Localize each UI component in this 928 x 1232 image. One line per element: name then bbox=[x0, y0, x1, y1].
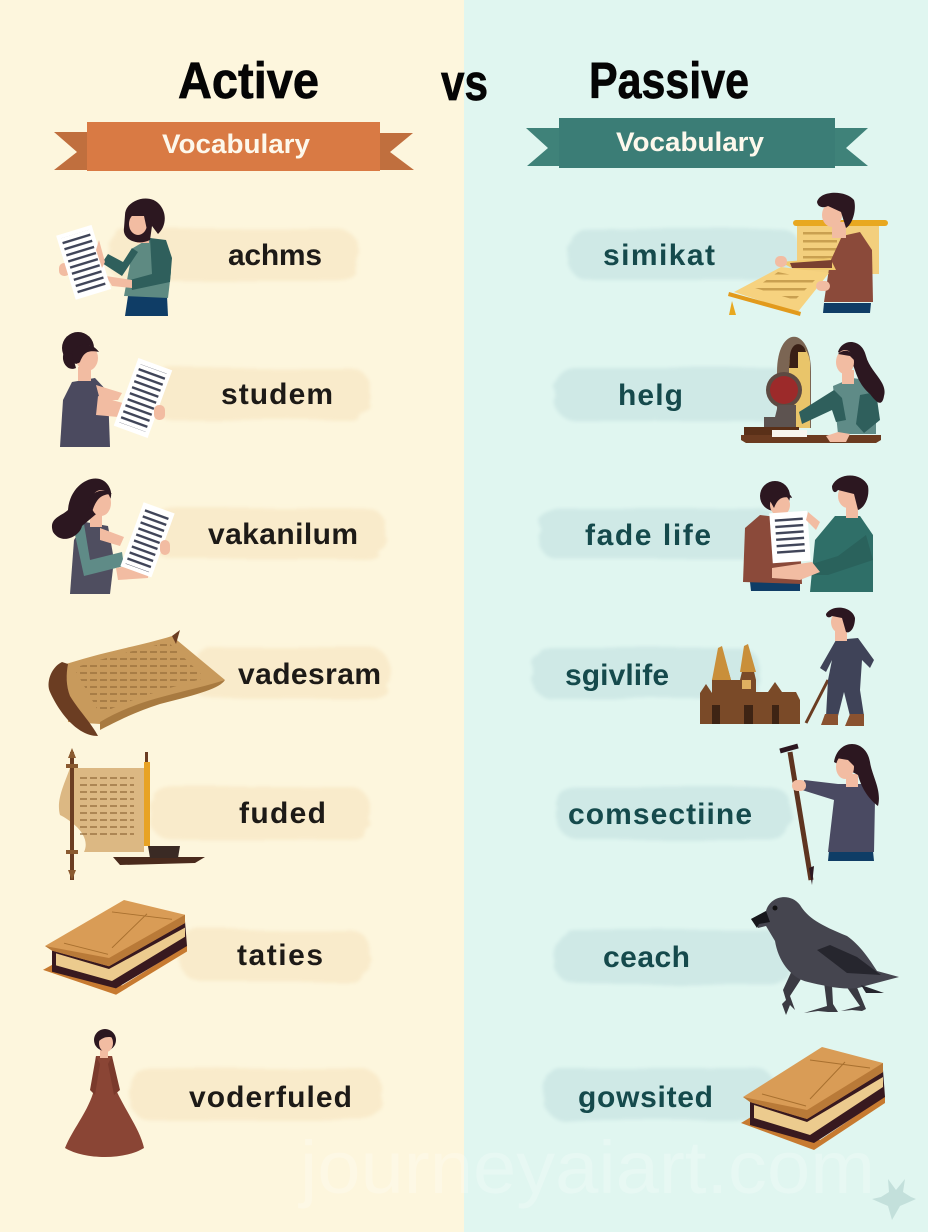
icon: closed book bbox=[43, 900, 187, 995]
row: simikat bbox=[569, 193, 888, 316]
row: ceach: ceach bbox=[603, 941, 690, 974]
row: comsectiine: comsectiine bbox=[568, 798, 752, 831]
icon: two men sharing paper bbox=[743, 476, 873, 592]
icon: woman with staff bbox=[780, 744, 879, 885]
row: vakanilum bbox=[52, 478, 386, 594]
row: fuded bbox=[59, 748, 370, 880]
row: fade life bbox=[539, 476, 873, 592]
icon: brown scroll bbox=[48, 630, 225, 736]
icon: woman reading paper bbox=[56, 198, 172, 316]
row: vadesram: vadesram bbox=[238, 658, 381, 691]
row: simikat: simikat bbox=[603, 239, 715, 272]
row: voderfuled: voderfuled bbox=[189, 1081, 352, 1114]
icon: woman with long hair and paper bbox=[52, 478, 175, 594]
ribbon: active vocabulary: Vocabulary bbox=[162, 129, 310, 159]
row: comsectiine bbox=[557, 744, 879, 885]
row: gowsited bbox=[544, 1047, 885, 1150]
icon: man with golden scroll bbox=[728, 193, 888, 316]
ribbon: passive vocabulary bbox=[526, 118, 868, 168]
row: studem bbox=[60, 332, 370, 447]
heading: Passive: Passive bbox=[589, 52, 749, 109]
row: gowsited: gowsited bbox=[578, 1081, 713, 1114]
row: fuded: fuded bbox=[239, 797, 326, 830]
row: sgivlife: sgivlife bbox=[565, 659, 669, 692]
ribbon: passive vocabulary: Vocabulary bbox=[616, 127, 764, 157]
watermark: journeyaiart.com bbox=[298, 1126, 875, 1209]
icon: closed book right bbox=[741, 1047, 885, 1150]
row: sgivlife bbox=[532, 608, 874, 726]
icon: crow bbox=[751, 897, 899, 1015]
title bbox=[178, 52, 749, 111]
row: achms: achms bbox=[228, 239, 322, 272]
panel: active background bbox=[0, 0, 464, 1232]
row: studem: studem bbox=[221, 378, 333, 411]
row: fade life: fade life bbox=[585, 519, 711, 552]
row: ceach bbox=[555, 897, 899, 1015]
row: taties bbox=[43, 900, 370, 995]
row: taties: taties bbox=[237, 939, 323, 972]
ribbon: active vocabulary bbox=[54, 122, 414, 171]
icon: woman with paper bbox=[60, 332, 172, 447]
row: voderfuled bbox=[65, 1029, 382, 1157]
heading: vs: vs bbox=[441, 54, 488, 111]
icon: woman at press machine bbox=[741, 337, 885, 443]
icon: man with stick bbox=[806, 608, 874, 726]
icon: parchment and quill bbox=[59, 748, 205, 880]
icon: watermark star bbox=[872, 1179, 916, 1220]
row: vadesram bbox=[48, 630, 390, 736]
row: achms bbox=[56, 198, 358, 316]
panel: passive background bbox=[464, 0, 928, 1232]
icon: woman in long dress bbox=[65, 1029, 144, 1157]
heading: Active: Active bbox=[178, 52, 319, 109]
row: helg bbox=[555, 337, 885, 443]
icon: castle bbox=[700, 644, 800, 724]
row: helg: helg bbox=[618, 379, 683, 412]
row: vakanilum: vakanilum bbox=[208, 518, 358, 551]
